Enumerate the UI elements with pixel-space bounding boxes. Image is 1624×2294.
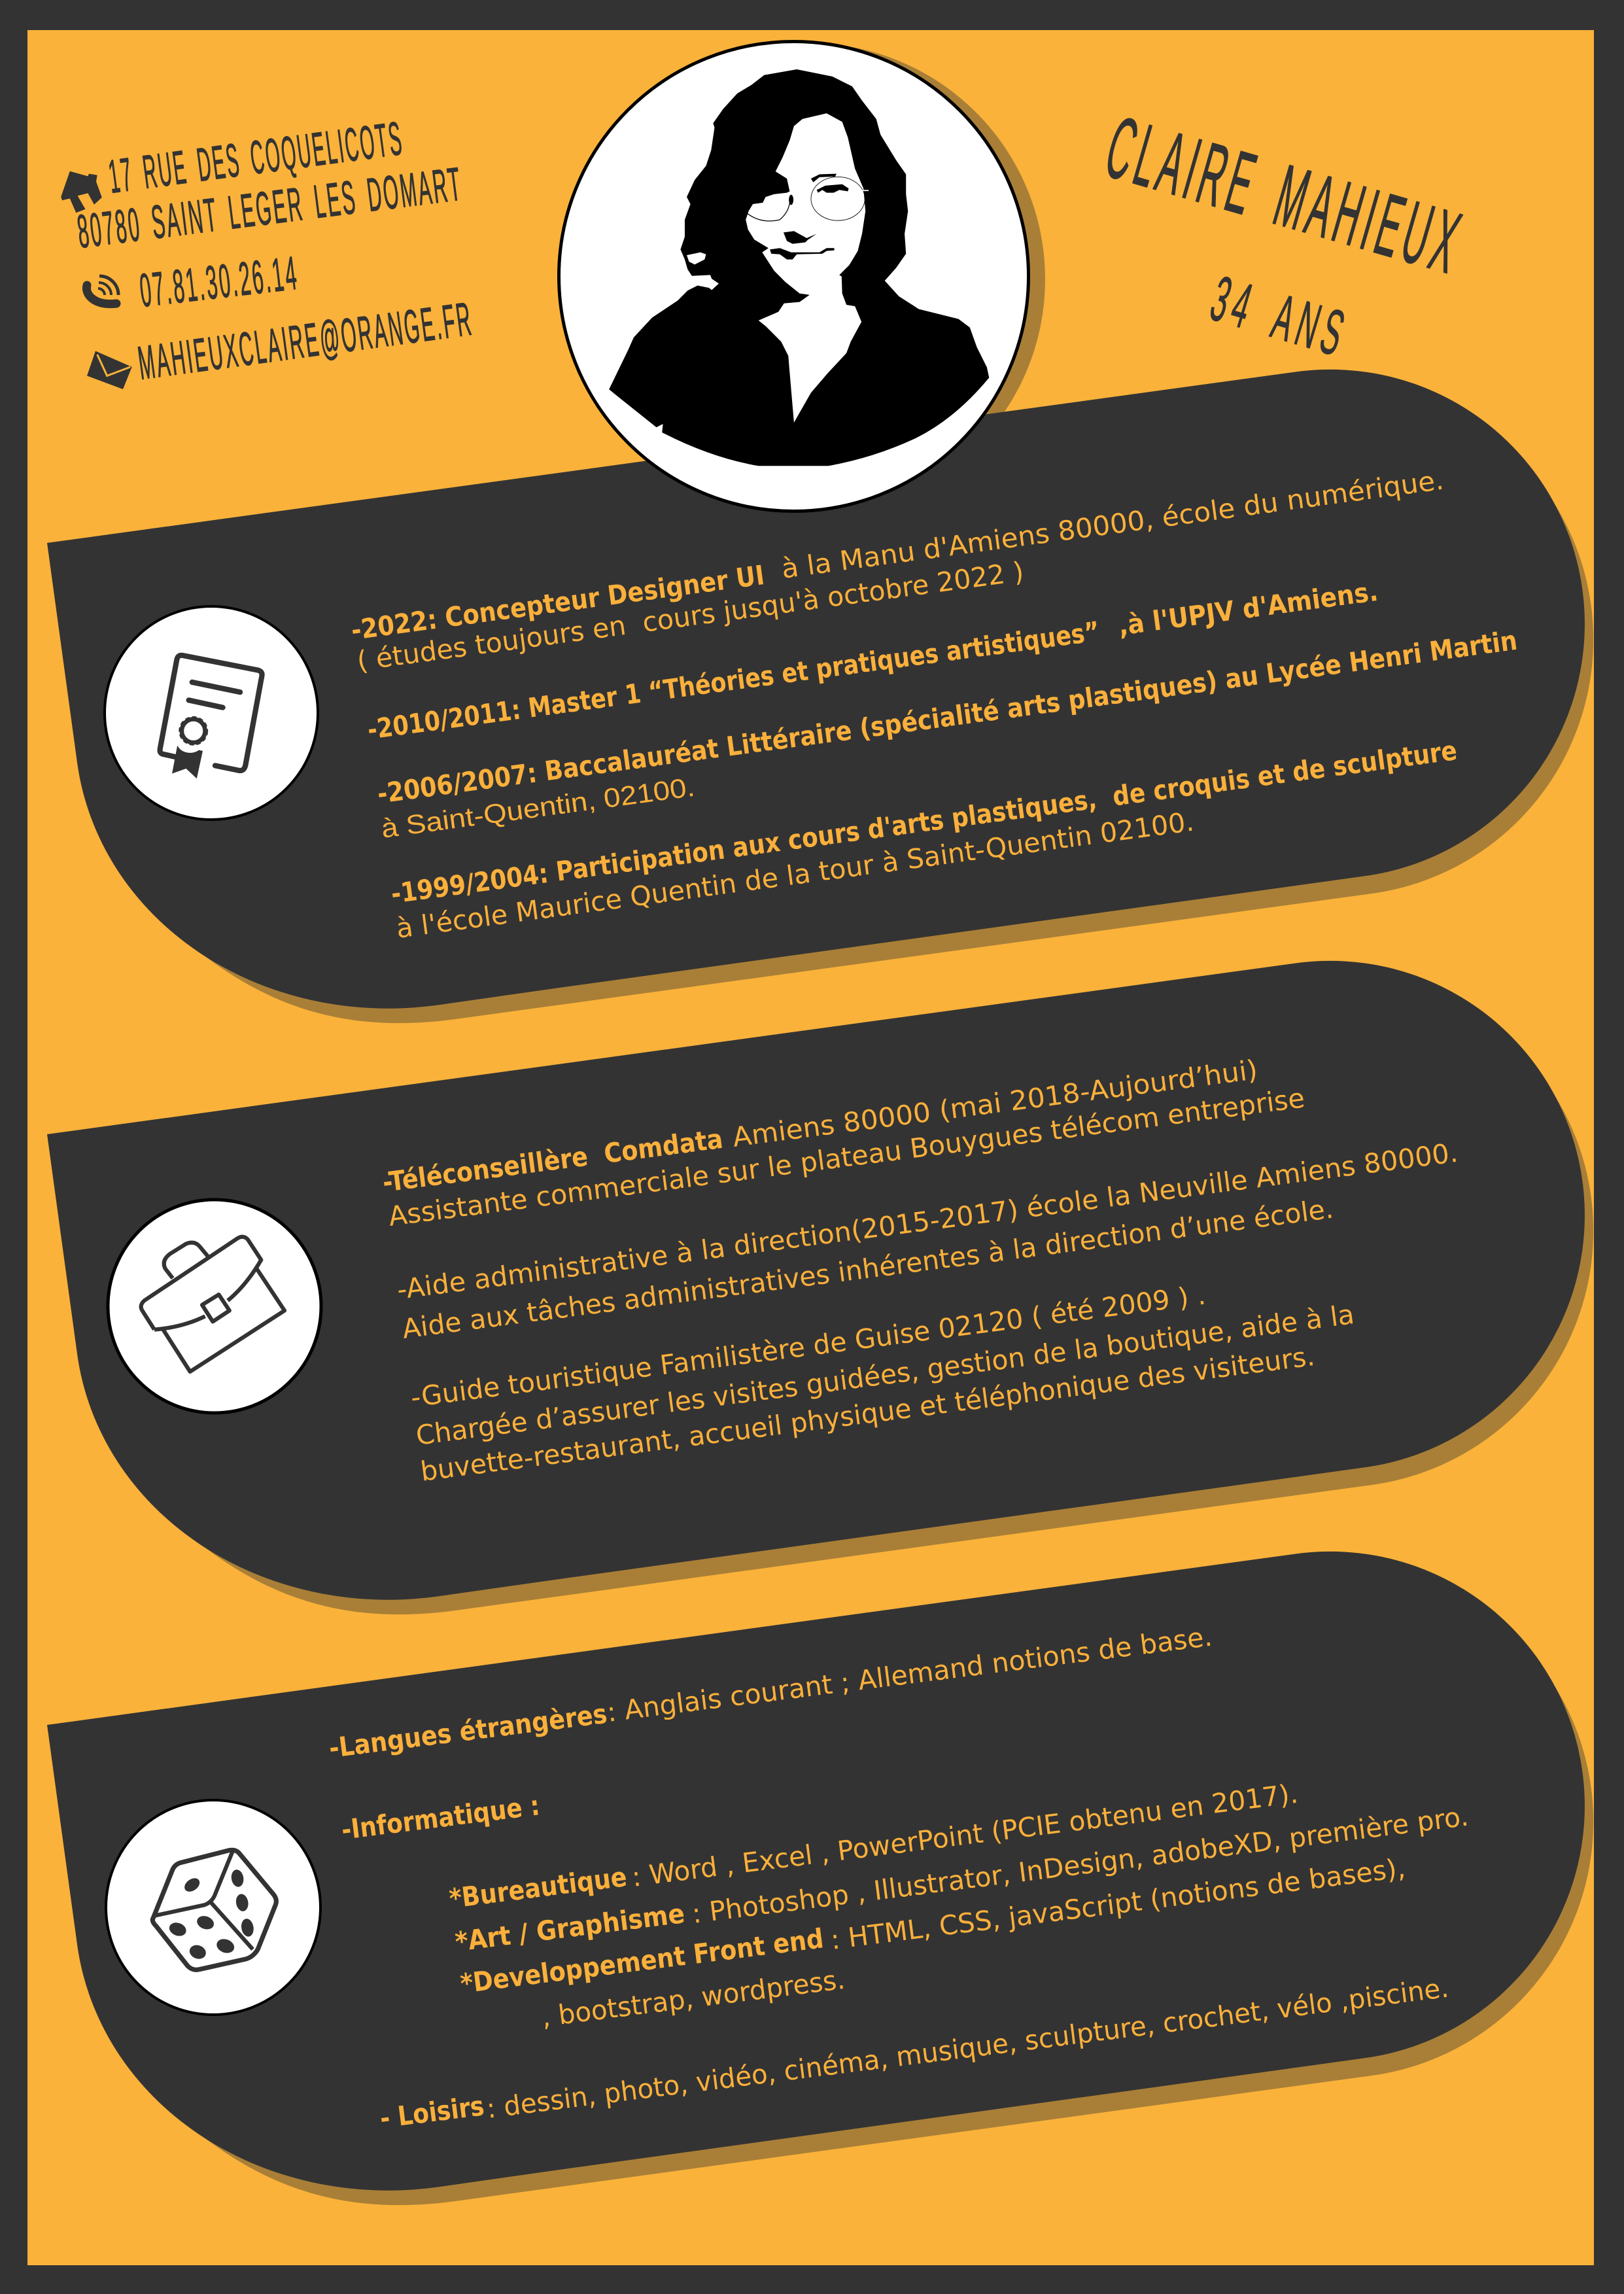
portrait circle shadow bbox=[573, 43, 1045, 515]
job 3 detail line 1: Chargée d’assurer les visites guidées, gestion de la boutique, aide à la bbox=[414, 1298, 1356, 1451]
entry 1999: -1999/2004: Participation aux cours d'arts plastiques, de croquis et de sculpture bbox=[389, 735, 1459, 910]
entry 2022 note: ( études toujours en cours jusqu'à octobre 2022 ) bbox=[355, 556, 1026, 677]
education text bbox=[349, 464, 1519, 945]
job 3 title: -Guide touristique Familistère de Guise 02120 ( été 2009 ) . bbox=[409, 1279, 1207, 1414]
job 2 title: -Aide administrative à la direction(2015-2017) école la Neuville Amiens 80000. bbox=[395, 1137, 1460, 1306]
graphics detail: : Photoshop , Illustrator, InDesign, adobeXD, première pro. bbox=[690, 1800, 1470, 1930]
icon: briefcase bbox=[141, 1237, 285, 1372]
icon circle: diploma bbox=[105, 606, 318, 820]
office detail: : Word , Excel , PowerPoint (PCIE obtenu en 2017). bbox=[630, 1778, 1300, 1893]
job 3 detail line 2: buvette-restaurant, accueil physique et téléphonique des visiteurs. bbox=[419, 1340, 1317, 1487]
panel 3 shadow bbox=[138, 1533, 1624, 2235]
icon circle: dice bbox=[106, 1800, 320, 2015]
job 1 place: Amiens 80000 (mai 2018-Aujourd’hui) bbox=[731, 1054, 1260, 1153]
graphics label: *Art / Graphisme bbox=[453, 1898, 686, 1958]
panel 1 shadow bbox=[138, 351, 1624, 1053]
portrait bbox=[559, 42, 1028, 512]
entry 1999 place: à l'école Maurice Quentin de la tour à Saint-Quentin 02100. bbox=[394, 806, 1196, 945]
text: MAHIEUXCLAIRE@ORANGE.FR bbox=[135, 293, 476, 390]
hobbies label: - Loisirs bbox=[378, 2090, 486, 2134]
office label: *Bureautique bbox=[447, 1861, 629, 1915]
icon: diploma bbox=[160, 655, 262, 778]
text: 34 ANS bbox=[1203, 262, 1357, 370]
icon: house bbox=[61, 171, 102, 213]
text: 17 RUE DES COQUELICOTS bbox=[106, 113, 406, 203]
icon: envelope bbox=[87, 351, 132, 389]
panel 2 shadow bbox=[138, 942, 1624, 1644]
icon: phone bbox=[86, 276, 118, 304]
entry 2010: -2010/2011: Master 1 “Théories et pratiques artistiques” bbox=[366, 616, 1101, 746]
entry 2022 detail: à la Manu d'Amiens 80000, école du numérique. bbox=[780, 464, 1445, 585]
panel 3 shape bbox=[47, 1520, 1617, 2231]
contact block bbox=[61, 113, 476, 390]
front end label: *Developpement Front end bbox=[458, 1922, 825, 2000]
skills text bbox=[327, 1620, 1470, 2134]
panel 3: skills bbox=[47, 1520, 1617, 2231]
entry 2006 place: à Saint-Quentin, 02100. bbox=[379, 772, 697, 844]
entry 2022: -2022: Concepteur Designer UI bbox=[349, 559, 767, 646]
front end detail line 2: , bootstrap, wordpress. bbox=[540, 1964, 847, 2033]
panel 1 shape bbox=[47, 338, 1617, 1049]
front end detail: : HTML, CSS, javaScript (notions de bases), bbox=[829, 1852, 1407, 1956]
contact block: 07.81.30.26.14 bbox=[137, 247, 301, 317]
panel 2: experience bbox=[47, 929, 1617, 1641]
portrait circle bbox=[559, 42, 1028, 512]
job 1 title: -Téléconseillère Comdata bbox=[381, 1123, 725, 1198]
panel 2 shape bbox=[47, 929, 1617, 1641]
icon: dice bbox=[152, 1850, 276, 1970]
text: 80780 SAINT LEGER LES DOMART bbox=[75, 158, 465, 258]
job 2 detail: Aide aux tâches administratives inhérentes à la direction d’une école. bbox=[400, 1192, 1335, 1345]
job 1 detail: Assistante commerciale sur le plateau Bouygues télécom entreprise bbox=[387, 1082, 1307, 1232]
languages heading: -Langues étrangères bbox=[327, 1698, 609, 1764]
entry 2010 place: ,à l'UPJV d'Amiens. bbox=[1116, 576, 1380, 642]
panel 1: education bbox=[47, 338, 1617, 1049]
experience text bbox=[381, 1054, 1460, 1487]
icon circle: briefcase bbox=[108, 1200, 321, 1413]
portrait silhouette bbox=[609, 69, 989, 466]
computing heading: -Informatique : bbox=[339, 1790, 542, 1846]
hobbies detail: : dessin, photo, vidéo, cinéma, musique, sculpture, crochet, vélo ,piscine. bbox=[485, 1972, 1451, 2125]
languages detail: : Anglais courant ; Allemand notions de base. bbox=[605, 1620, 1214, 1728]
